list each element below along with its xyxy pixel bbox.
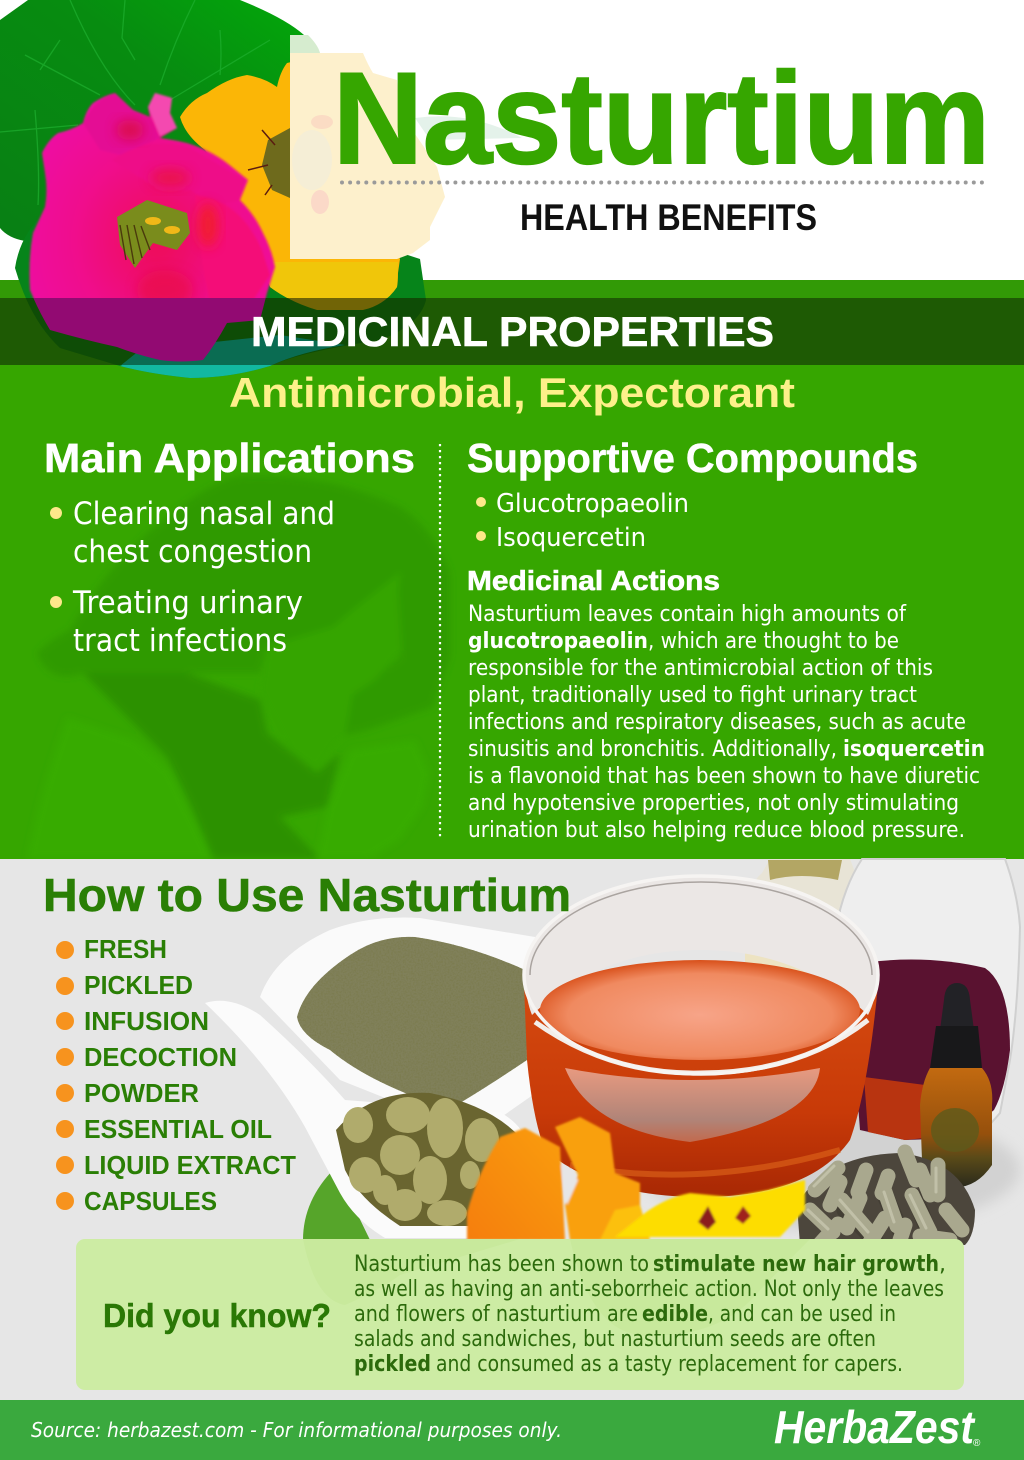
flower: yellow nasturtium — [180, 60, 400, 310]
flower: magenta nasturtium — [29, 93, 275, 362]
coat — [27, 717, 213, 859]
callout text: , — [939, 1252, 946, 1277]
callout text: Nasturtium has been shown to — [354, 1252, 649, 1277]
footer bar — [0, 1400, 1024, 1460]
glass base — [565, 1068, 820, 1142]
item: essential oil: ESSENTIAL OIL — [84, 1114, 272, 1144]
heading: how to use nasturtium: How to Use Nasturtium — [43, 869, 571, 921]
text block: medicinal actions — [468, 601, 985, 843]
title: Nasturtium — [333, 45, 990, 191]
list: compounds: Glucotropaeolin — [496, 489, 689, 519]
heading: medicinal actions: Medicinal Actions — [467, 565, 720, 596]
callout text: and consumed as a tasty replacement for capers. — [436, 1352, 903, 1377]
shadow — [640, 1110, 1020, 1230]
scarf — [83, 673, 340, 859]
capers — [336, 1093, 520, 1226]
text block: medicinal actions: sinusitis and bronchitis. Additionally, — [468, 736, 837, 762]
callout text: pickled — [354, 1352, 431, 1377]
flower centre — [117, 200, 190, 268]
callout heading: Did you know? — [103, 1297, 331, 1334]
cream overlay on image — [290, 53, 445, 259]
text block: medicinal actions: Nasturtium leaves contain high amounts of — [468, 601, 907, 627]
liquid surface — [540, 960, 860, 1060]
panel: medicinal properties green background — [0, 280, 1024, 859]
item: decoction: DECOCTION — [84, 1042, 237, 1072]
leaf: large green leaf — [0, 0, 330, 241]
list: compounds — [476, 489, 689, 553]
text block: medicinal actions: plant, traditionally used to fight urinary tract — [468, 682, 917, 708]
image: nasturtium leaves and flowers — [0, 0, 522, 378]
heading: supportive compounds: Supportive Compounds — [467, 435, 918, 481]
callout text: stimulate new hair growth — [653, 1252, 939, 1277]
callout text: salads and sandwiches, but nasturtium seeds are often — [354, 1327, 876, 1352]
item: liquid extract: LIQUID EXTRACT — [84, 1150, 296, 1180]
vertical dotted divider — [439, 444, 441, 837]
band: dark heading band — [0, 298, 1024, 365]
heading: antimicrobial, expectorant: Antimicrobial, Expectorant — [229, 369, 795, 416]
item: powder: POWDER — [84, 1078, 199, 1108]
callout: did you know — [76, 1239, 964, 1390]
leaf: lower dark leaf — [15, 212, 426, 378]
bottle: red liquid bottle — [840, 859, 1020, 1140]
text block: medicinal actions: isoquercetin — [843, 736, 985, 762]
powder — [297, 937, 527, 1103]
background image: woman with scarf — [27, 476, 450, 859]
callout text — [354, 1252, 946, 1377]
spoon: white spoon — [205, 1001, 526, 1238]
list: main applications: tract infections — [73, 623, 287, 659]
flowers: orange and yellow nasturtium — [467, 1117, 805, 1240]
list: main applications: Treating urinary — [72, 585, 303, 621]
text block: medicinal actions: glucotropaeolin — [468, 628, 648, 654]
callout text: , and can be used in — [708, 1302, 896, 1327]
footer logo: ® — [973, 1438, 981, 1449]
glass: glass of liquid — [524, 876, 878, 1197]
item: fresh: FRESH — [84, 934, 167, 964]
text block: medicinal actions: urination but also helping reduce blood pressure. — [468, 817, 965, 843]
callout text: and flowers of nasturtium are — [354, 1302, 638, 1327]
title dotted divider — [342, 180, 985, 184]
hand — [317, 740, 430, 859]
glass interior above liquid — [524, 876, 878, 1015]
face — [260, 573, 402, 770]
image: preparations of nasturtium — [205, 859, 1020, 1246]
faint image showing through callout — [303, 1239, 810, 1335]
list: compounds: Isoquercetin — [496, 523, 646, 553]
list: main applications: Clearing nasal and — [73, 496, 335, 532]
callout text: edible — [642, 1302, 708, 1327]
text block: medicinal actions: and hypotensive properties, not only stimulating — [468, 790, 959, 816]
list: main applications: chest congestion — [73, 534, 312, 570]
heading: medicinal properties: MEDICINAL PROPERTIES — [251, 308, 774, 355]
capsules in bowl — [797, 1152, 975, 1246]
bottle: oil bottle — [745, 859, 858, 1010]
image portion seen through band — [26, 298, 426, 365]
leaf: small leaf under spoon — [303, 1168, 370, 1240]
footer logo: HerbaZest — [774, 1401, 975, 1453]
text block: medicinal actions: , which are thought to be — [648, 628, 899, 654]
list: forms of use — [56, 934, 296, 1216]
list: main applications — [50, 496, 335, 659]
item: infusion: INFUSION — [84, 1006, 209, 1036]
hair — [37, 476, 450, 735]
item: pickled: PICKLED — [84, 970, 193, 1000]
panel: how to use background — [0, 859, 1024, 1400]
text block: medicinal actions: infections and respiratory diseases, such as acute — [468, 709, 966, 735]
bottle: amber dropper bottle — [920, 983, 992, 1187]
heading: main applications: Main Applications — [44, 435, 415, 481]
footer source text: Source: herbazest.com - For informational purposes only. — [31, 1418, 562, 1442]
bowl: white powder bowl — [260, 918, 540, 1130]
text block: medicinal actions: responsible for the antimicrobial action of this — [468, 655, 933, 681]
item: capsules: CAPSULES — [84, 1186, 217, 1216]
subtitle: HEALTH BENEFITS — [520, 197, 817, 238]
